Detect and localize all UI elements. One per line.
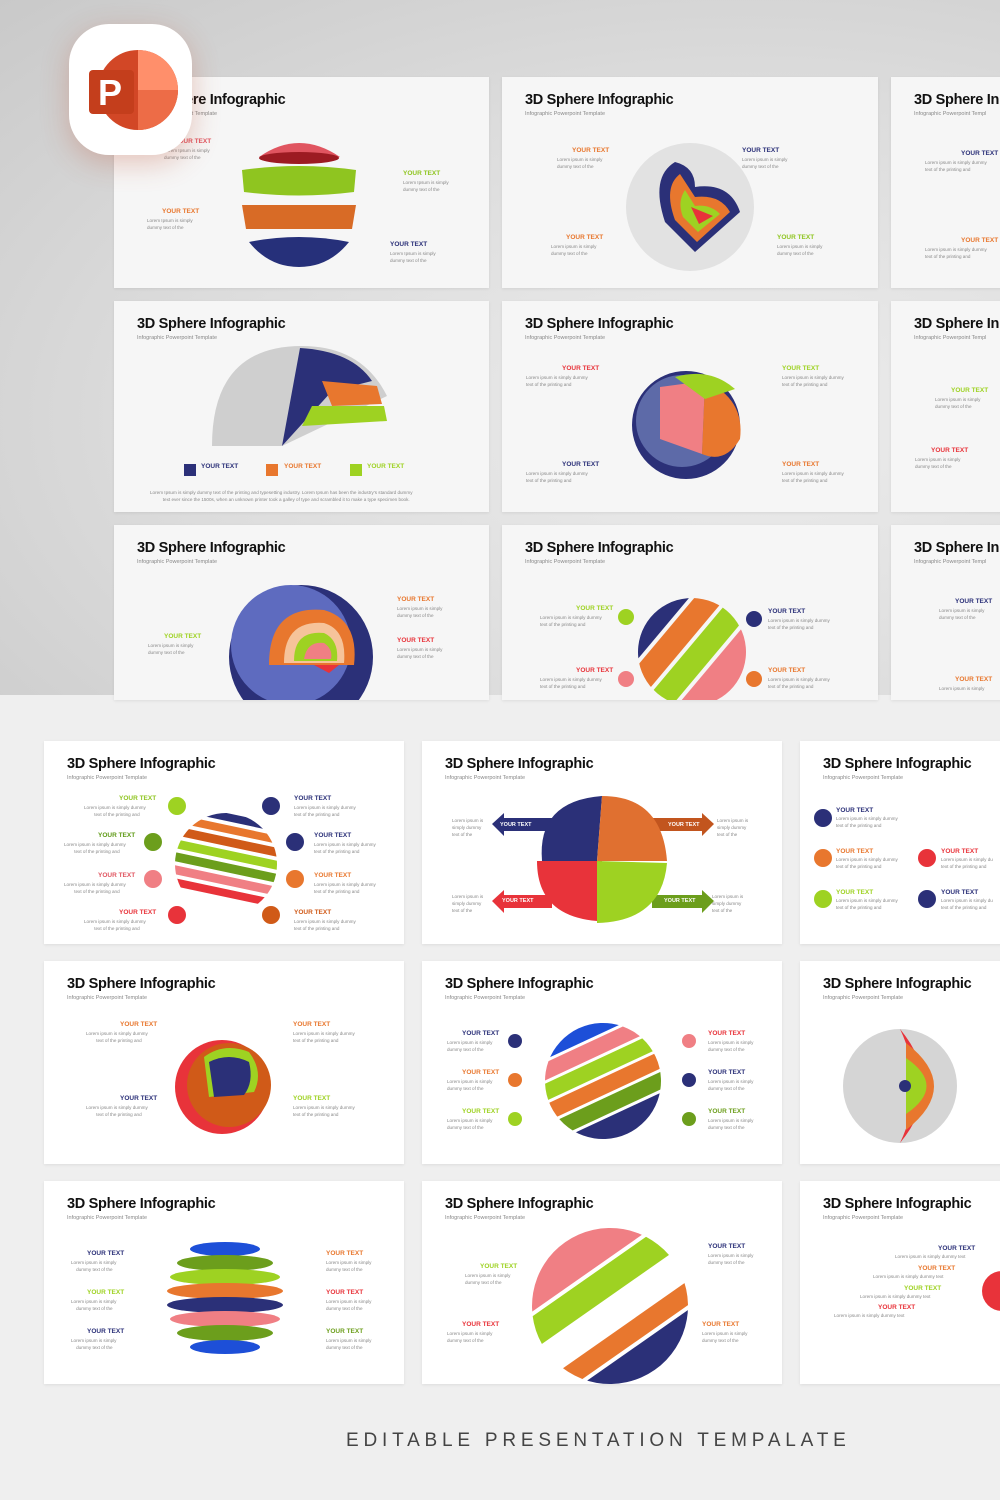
slide: diagonal striped sphere: Lorem ipsum is simply	[447, 1118, 492, 1123]
slide: big diagonal sphere: dummy text of the	[465, 1280, 502, 1285]
slide: big diagonal sphere: YOUR TEXT	[480, 1263, 517, 1270]
slide: heart sphere: dummy text of the	[777, 251, 814, 256]
slide: striped sphere with 8 items: Infographic Powerpoint Template	[67, 775, 147, 781]
slide: layered core sphere: 3D Sphere Infographic	[137, 540, 285, 556]
slide: partial list: text of the printing and	[941, 905, 986, 910]
slide: heart sphere: Infographic Powerpoint Template	[525, 111, 605, 117]
slide: partial right column top: 3D Sphere In	[914, 92, 999, 108]
slide: horizontal band sphere: dummy text of the	[403, 187, 440, 192]
slide: cut sphere: YOUR TEXT	[120, 1021, 157, 1028]
slide: heart sphere: Lorem ipsum is simply	[551, 244, 596, 249]
slide: arrows sphere: simply dummy	[452, 901, 481, 906]
slide: horizontal band sphere: Lorem Ipsum is simply	[390, 251, 436, 256]
slide: horizontal band sphere	[114, 77, 489, 288]
slide: stacked discs sphere: Infographic Powerpoint Template	[67, 1215, 147, 1221]
slide: striped sphere with 8 items: YOUR TEXT	[119, 909, 156, 916]
slide: big diagonal sphere: Lorem ipsum is simply	[702, 1331, 747, 1336]
slide: arrows sphere: Lorem ipsum is	[712, 894, 743, 899]
slide: segmented sphere: text of the printing and	[526, 478, 571, 483]
slide: diagonal bands sphere: text of the printing and	[768, 684, 813, 689]
slide: partial list 2: YOUR TEXT	[904, 1285, 941, 1292]
slide: horizontal band sphere: YOUR TEXT	[390, 241, 427, 248]
slide: partial list: Infographic Powerpoint Template	[823, 775, 903, 781]
slide: striped sphere with 8 items: text of the printing and	[74, 849, 120, 854]
slide: striped sphere with 8 items: YOUR TEXT	[119, 795, 156, 802]
slide: big diagonal sphere: dummy text of the	[702, 1338, 739, 1343]
slide: striped sphere with 8 items: Lorem ipsum is simply dummy	[314, 882, 376, 887]
slide: arrows sphere: YOUR TEXT	[500, 822, 531, 828]
slide: cut sphere: text of the printing and	[293, 1112, 338, 1117]
slide: layered core sphere: dummy text of the	[148, 650, 185, 655]
slide: cut sphere: text of the printing and	[293, 1038, 338, 1043]
slide: arrows sphere: YOUR TEXT	[668, 822, 699, 828]
slide: diagonal bands sphere: Lorem ipsum is simply dummy	[768, 618, 830, 623]
slide: stacked discs sphere: 3D Sphere Infographic	[67, 1196, 215, 1212]
slide: partial right column top: YOUR TEXT	[961, 150, 998, 157]
slide: layered core sphere: Lorem ipsum is simply	[397, 647, 442, 652]
slide: stacked discs sphere: dummy text of the	[76, 1345, 113, 1350]
slide: striped sphere with 8 items: YOUR TEXT	[294, 909, 331, 916]
slide: segmented sphere: YOUR TEXT	[562, 365, 599, 372]
slide: diagonal striped sphere: dummy text of the	[708, 1047, 745, 1052]
slide: stacked discs sphere: Lorem ipsum is simply	[326, 1260, 371, 1265]
slide: diagonal striped sphere: Lorem ipsum is simply	[447, 1040, 492, 1045]
slide: striped sphere with 8 items: text of the printing and	[314, 889, 359, 894]
slide: diagonal bands sphere: text of the printing and	[768, 625, 813, 630]
slide: arrows sphere: simply dummy	[452, 825, 481, 830]
slide: segmented sphere: text of the printing and	[782, 382, 827, 387]
slide: heart sphere: YOUR TEXT	[572, 147, 609, 154]
slide: diagonal striped sphere: Infographic Powerpoint Template	[445, 995, 525, 1001]
slide: horizontal band sphere: YOUR TEXT	[403, 170, 440, 177]
slide: quarter sphere: text ever since the 1500s, when an unknown printer took a galley of type and scrambled it to make a type specimen book.	[163, 497, 410, 502]
slide: big diagonal sphere: dummy text of the	[708, 1260, 745, 1265]
slide: cut sphere: YOUR TEXT	[120, 1095, 157, 1102]
slide: diagonal striped sphere: Lorem ipsum is simply	[447, 1079, 492, 1084]
slide: arrows sphere: 3D Sphere Infographic	[445, 756, 593, 772]
slide: partial list 2: YOUR TEXT	[878, 1304, 915, 1311]
icon circles	[168, 797, 186, 815]
slide: quarter sphere: YOUR TEXT	[201, 463, 238, 470]
slide: heart sphere: YOUR TEXT	[742, 147, 779, 154]
slide: striped sphere with 8 items: Lorem ipsum is simply dummy	[294, 919, 356, 924]
slide: cut sphere: YOUR TEXT	[293, 1095, 330, 1102]
slide: diagonal striped sphere: YOUR TEXT	[708, 1108, 745, 1115]
sphere bands	[242, 143, 356, 267]
slide: diagonal striped sphere	[422, 961, 782, 1164]
slide: partial: Infographic Powerpoint Templ	[914, 559, 986, 565]
slide: stacked discs sphere: YOUR TEXT	[87, 1328, 124, 1335]
slide: stacked discs sphere: Lorem ipsum is simply	[71, 1338, 116, 1343]
slide: layered core sphere: Infographic Powerpoint Template	[137, 559, 217, 565]
slide: arrows sphere: Lorem ipsum is	[717, 818, 748, 823]
top area background	[0, 0, 1000, 695]
slide: segmented sphere: YOUR TEXT	[562, 461, 599, 468]
slide: diagonal striped sphere: YOUR TEXT	[708, 1069, 745, 1076]
slide: partial: 3D Sphere In	[914, 540, 999, 556]
slide: partial list: Lorem ipsum is simply dummy	[836, 857, 898, 862]
slide: diagonal striped sphere: dummy text of the	[708, 1086, 745, 1091]
slide: horizontal band sphere: dummy text of the	[147, 225, 184, 230]
slide: partial list: YOUR TEXT	[941, 889, 978, 896]
slide: partial right column top: Infographic Powerpoint Templ	[914, 111, 986, 117]
slide: layered core sphere: dummy text of the	[397, 613, 434, 618]
slide: big diagonal sphere: YOUR TEXT	[708, 1243, 745, 1250]
slide: diagonal striped sphere: YOUR TEXT	[462, 1069, 499, 1076]
slide: layered core sphere: dummy text of the	[397, 654, 434, 659]
slide: arrows sphere: simply dummy	[717, 825, 746, 830]
slide: big diagonal sphere	[422, 1181, 782, 1384]
slide: striped sphere with 8 items: Lorem ipsum is simply dummy	[294, 805, 356, 810]
slide: stacked discs sphere: YOUR TEXT	[326, 1328, 363, 1335]
slide: diagonal striped sphere: dummy text of the	[447, 1047, 484, 1052]
slide: segmented sphere: text of the printing and	[526, 382, 571, 387]
slide: partial list: text of the printing and	[836, 905, 881, 910]
slide: layered core sphere: Lorem ipsum is simply	[148, 643, 193, 648]
slide: heart sphere: dummy text of the	[742, 164, 779, 169]
slide: big diagonal sphere: YOUR TEXT	[462, 1321, 499, 1328]
slide: segmented sphere: Infographic Powerpoint Template	[525, 335, 605, 341]
slide: layered core sphere: YOUR TEXT	[397, 637, 434, 644]
slide: stacked discs sphere: YOUR TEXT	[87, 1250, 124, 1257]
slide: big diagonal sphere: YOUR TEXT	[702, 1321, 739, 1328]
slide: heart sphere: 3D Sphere Infographic	[525, 92, 673, 108]
slide: layered core sphere: YOUR TEXT	[397, 596, 434, 603]
slide: cut sphere	[44, 961, 404, 1164]
striped sphere	[175, 813, 277, 904]
slide: diagonal striped sphere: Lorem ipsum is simply	[708, 1040, 753, 1045]
slide: big diagonal sphere: Lorem ipsum is simply	[447, 1331, 492, 1336]
slide: partial list: text of the printing and	[836, 864, 881, 869]
slide: cut sphere: YOUR TEXT	[293, 1021, 330, 1028]
slide: segmented sphere: Lorem ipsum is simply dummy	[782, 471, 844, 476]
slide: heart sphere: Lorem ipsum is simply	[742, 157, 787, 162]
slide: diagonal striped sphere: dummy text of the	[708, 1125, 745, 1130]
slide: arrows sphere: Infographic Powerpoint Template	[445, 775, 525, 781]
slide: layered core sphere: Lorem ipsum is simply	[397, 606, 442, 611]
slide: cut sphere: text of the printing and	[96, 1112, 142, 1117]
footer text: EDITABLE PRESENTATION TEMPALATE	[346, 1430, 851, 1451]
slide: arrows sphere: Lorem ipsum is	[452, 894, 483, 899]
slide: cut sphere: text of the printing and	[96, 1038, 142, 1043]
slide: diagonal bands sphere: YOUR TEXT	[768, 667, 805, 674]
slide: partial: 3D Sphere In	[914, 316, 999, 332]
slide: partial cross-section: 3D Sphere Infographic	[823, 976, 971, 992]
slide: quarter sphere: 3D Sphere Infographic	[137, 316, 285, 332]
slide: striped sphere with 8 items: text of the printing and	[94, 812, 140, 817]
slide: quarter sphere: Lorem Ipsum is simply dummy text of the printing and typesetting industry. Lorem Ipsum has been the industry's standard dummy	[150, 490, 413, 495]
slide: stacked discs sphere: dummy text of the	[326, 1345, 363, 1350]
slide: layered core sphere	[114, 525, 489, 700]
slide: partial: YOUR TEXT	[955, 676, 992, 683]
slide: striped sphere with 8 items: Lorem ipsum is simply dummy	[64, 842, 126, 847]
slide: partial right column top: Lorem ipsum is simply dummy	[925, 247, 987, 252]
slide: partial list: text of the printing and	[941, 864, 986, 869]
slide: striped sphere with 8 items: 3D Sphere Infographic	[67, 756, 215, 772]
slide: arrows sphere: text of the	[712, 908, 732, 913]
slide: stacked discs sphere: YOUR TEXT	[326, 1289, 363, 1296]
slide: partial: YOUR TEXT	[931, 447, 968, 454]
slide: cut sphere: Lorem ipsum is simply dummy	[293, 1031, 355, 1036]
slide: segmented sphere: YOUR TEXT	[782, 365, 819, 372]
slide: arrows sphere: YOUR TEXT	[502, 898, 533, 904]
slide: partial list 2: YOUR TEXT	[918, 1265, 955, 1272]
slide: partial list: text of the printing and	[836, 823, 881, 828]
slide: partial list 2: Lorem ipsum is simply dummy text	[834, 1313, 904, 1318]
slide: diagonal striped sphere: dummy text of the	[447, 1125, 484, 1130]
slide: partial cross-section: Infographic Powerpoint Template	[823, 995, 903, 1001]
label left top: YOUR TEXT	[174, 138, 211, 145]
slide: stacked discs sphere	[44, 1181, 404, 1384]
slide: partial list 2: 3D Sphere Infographic	[823, 1196, 971, 1212]
slide: diagonal bands sphere: Infographic Powerpoint Template	[525, 559, 605, 565]
slide: heart sphere: YOUR TEXT	[777, 234, 814, 241]
slide: stacked discs sphere: dummy text of the	[326, 1267, 363, 1272]
slide: cut sphere: 3D Sphere Infographic	[67, 976, 215, 992]
slide: diagonal bands sphere: text of the printing and	[540, 684, 585, 689]
slide: striped sphere with 8 items: Lorem ipsum is simply dummy	[84, 919, 146, 924]
slide: partial: YOUR TEXT	[955, 598, 992, 605]
slide: stacked discs sphere: Lorem ipsum is simply	[71, 1299, 116, 1304]
slide: partial: Infographic Powerpoint Templ	[914, 335, 986, 341]
slide: diagonal striped sphere: Lorem ipsum is simply	[708, 1118, 753, 1123]
slide: big diagonal sphere: dummy text of the	[447, 1338, 484, 1343]
slide: horizontal band sphere: dummy text of the	[390, 258, 427, 263]
slide: segmented sphere: YOUR TEXT	[782, 461, 819, 468]
slide: segmented sphere: Lorem ipsum is simply dummy	[782, 375, 844, 380]
label left top	[164, 138, 212, 160]
slide: arrows sphere: Lorem ipsum is	[452, 818, 483, 823]
slide: diagonal bands sphere: Lorem ipsum is simply dummy	[768, 677, 830, 682]
slide: partial right column top: text of the printing and	[925, 254, 970, 259]
slide: heart sphere: Lorem ipsum is simply	[557, 157, 602, 162]
slide: horizontal band sphere: 3D Sphere Infographic	[137, 92, 285, 108]
slide: partial: dummy text of the	[915, 464, 952, 469]
slide: heart sphere: YOUR TEXT	[566, 234, 603, 241]
slide: horizontal band sphere: Lorem Ipsum is simply	[164, 148, 210, 153]
slide: segmented sphere: text of the printing and	[782, 478, 827, 483]
slide: stacked discs sphere: dummy text of the	[326, 1306, 363, 1311]
slide: striped sphere with 8 items: Lorem ipsum is simply dummy	[84, 805, 146, 810]
slide: arrows sphere	[422, 741, 782, 944]
slide: striped sphere with 8 items: YOUR TEXT	[294, 795, 331, 802]
slide: partial list 2: Lorem ipsum is simply dummy text	[895, 1254, 965, 1259]
slide: segmented sphere	[502, 301, 878, 512]
slide: horizontal band sphere: Infographic Powerpoint Template	[137, 111, 217, 117]
slide: striped sphere with 8 items: text of the printing and	[74, 889, 120, 894]
slide: horizontal band sphere: Lorem Ipsum is simply	[147, 218, 193, 223]
slide: diagonal striped sphere: YOUR TEXT	[708, 1030, 745, 1037]
slide: cut sphere: Lorem ipsum is simply dummy	[86, 1105, 148, 1110]
slide: striped sphere with 8 items: YOUR TEXT	[314, 832, 351, 839]
slide: partial: YOUR TEXT	[951, 387, 988, 394]
slide: partial list 2: Lorem ipsum is simply dummy text	[860, 1294, 930, 1299]
slide: diagonal bands sphere: YOUR TEXT	[576, 667, 613, 674]
slide: diagonal striped sphere: YOUR TEXT	[462, 1030, 499, 1037]
slide: partial list: YOUR TEXT	[836, 889, 873, 896]
slide: partial list: YOUR TEXT	[941, 848, 978, 855]
slide: horizontal band sphere: YOUR TEXT	[162, 208, 199, 215]
slide: partial list: YOUR TEXT	[836, 848, 873, 855]
slide: arrows sphere: text of the	[452, 832, 472, 837]
slide: striped sphere with 8 items: text of the printing and	[294, 812, 339, 817]
slide: heart sphere: Lorem ipsum is simply	[777, 244, 822, 249]
slide: partial right column top: Lorem ipsum is simply dummy	[925, 160, 987, 165]
slide: big diagonal sphere: Lorem ipsum is simply	[465, 1273, 510, 1278]
slide: striped sphere with 8 items: Lorem ipsum is simply dummy	[314, 842, 376, 847]
slide: striped sphere with 8 items: text of the printing and	[94, 926, 140, 931]
heart sphere graphic	[626, 143, 754, 271]
slide: heart sphere: dummy text of the	[551, 251, 588, 256]
slide: horizontal band sphere: Lorem Ipsum is simply	[403, 180, 449, 185]
slide: cut sphere: Lorem ipsum is simply dummy	[293, 1105, 355, 1110]
slide: partial	[891, 525, 1000, 700]
slide: heart sphere: dummy text of the	[557, 164, 594, 169]
slide: striped sphere with 8 items: text of the printing and	[314, 849, 359, 854]
legend	[184, 464, 196, 476]
slide: cut sphere: Infographic Powerpoint Template	[67, 995, 147, 1001]
slide: diagonal bands sphere: Lorem ipsum is simply dummy	[540, 677, 602, 682]
bottom area	[44, 741, 1000, 1451]
slide: diagonal bands sphere: Lorem ipsum is simply dummy	[540, 615, 602, 620]
slide: striped sphere with 8 items: text of the printing and	[294, 926, 339, 931]
slide: quarter sphere: YOUR TEXT	[284, 463, 321, 470]
slide: stacked discs sphere: YOUR TEXT	[326, 1250, 363, 1257]
slide: segmented sphere: Lorem ipsum is simply dummy	[526, 471, 588, 476]
slide: partial: dummy text of the	[939, 615, 976, 620]
slide: layered core sphere: YOUR TEXT	[164, 633, 201, 640]
slide: partial right column top: YOUR TEXT	[961, 237, 998, 244]
slide: diagonal striped sphere: dummy text of the	[447, 1086, 484, 1091]
slide: stacked discs sphere: Lorem ipsum is simply	[71, 1260, 116, 1265]
slide: partial list: Lorem ipsum is simply dummy	[836, 898, 898, 903]
slide: striped sphere with 8 items: YOUR TEXT	[98, 872, 135, 879]
slide: partial list 2	[800, 1181, 1000, 1384]
slide: stacked discs sphere: Lorem ipsum is simply	[326, 1338, 371, 1343]
slide: stacked discs sphere: dummy text of the	[76, 1306, 113, 1311]
slide: partial list: Lorem ipsum is simply du	[941, 857, 993, 862]
slide: quarter sphere: Infographic Powerpoint Template	[137, 335, 217, 341]
slide: partial right column top: text of the printing and	[925, 167, 970, 172]
slide: stacked discs sphere: dummy text of the	[76, 1267, 113, 1272]
slide: diagonal bands sphere: 3D Sphere Infographic	[525, 540, 673, 556]
slide: diagonal striped sphere: 3D Sphere Infographic	[445, 976, 593, 992]
slide: stacked discs sphere: Lorem ipsum is simply	[326, 1299, 371, 1304]
icon: powerpoint logo: P	[98, 72, 122, 113]
slide: diagonal bands sphere: YOUR TEXT	[768, 608, 805, 615]
slide: partial: dummy text of the	[935, 404, 972, 409]
slide: diagonal bands sphere: text of the printing and	[540, 622, 585, 627]
slide: partial: Lorem ipsum is simply	[935, 397, 980, 402]
slide: big diagonal sphere: Infographic Powerpoint Template	[445, 1215, 525, 1221]
slide: diagonal striped sphere: YOUR TEXT	[462, 1108, 499, 1115]
slide: arrows sphere: YOUR TEXT	[664, 898, 695, 904]
slide: diagonal bands sphere: YOUR TEXT	[576, 605, 613, 612]
slide: striped sphere with 8 items	[44, 741, 404, 944]
slide: partial right column top	[891, 77, 1000, 288]
slide: partial list: Lorem ipsum is simply dummy	[836, 816, 898, 821]
slide: arrows sphere: text of the	[717, 832, 737, 837]
slide: arrows sphere: simply dummy	[712, 901, 741, 906]
slide: stacked discs sphere: YOUR TEXT	[87, 1289, 124, 1296]
slide: partial cross-section	[800, 961, 1000, 1164]
slide: segmented sphere: Lorem ipsum is simply dummy	[526, 375, 588, 380]
slide: partial: Lorem ipsum is simply	[939, 608, 984, 613]
slide: partial: Lorem ipsum is simply	[915, 457, 960, 462]
slide: partial list	[800, 741, 1000, 944]
slide: cut sphere: Lorem ipsum is simply dummy	[86, 1031, 148, 1036]
slide: partial list: YOUR TEXT	[836, 807, 873, 814]
slide: quarter sphere: YOUR TEXT	[367, 463, 404, 470]
slide: partial list: Lorem ipsum is simply du	[941, 898, 993, 903]
slide: striped sphere with 8 items: YOUR TEXT	[314, 872, 351, 879]
slide: segmented sphere: 3D Sphere Infographic	[525, 316, 673, 332]
slide: big diagonal sphere: 3D Sphere Infographic	[445, 1196, 593, 1212]
slide: partial list 2: YOUR TEXT	[938, 1245, 975, 1252]
slide: horizontal band sphere: dummy text of the	[164, 155, 201, 160]
slide: heart sphere	[502, 77, 878, 288]
slide: quarter sphere	[114, 301, 489, 512]
slide: partial list 2: Lorem ipsum is simply dummy text	[873, 1274, 943, 1279]
slide: partial	[891, 301, 1000, 512]
slide: arrows sphere: text of the	[452, 908, 472, 913]
slide: diagonal striped sphere: Lorem ipsum is simply	[708, 1079, 753, 1084]
slide: striped sphere with 8 items: Lorem ipsum is simply dummy	[64, 882, 126, 887]
slide: striped sphere with 8 items: YOUR TEXT	[98, 832, 135, 839]
slide: partial list 2: Infographic Powerpoint Template	[823, 1215, 903, 1221]
slide: partial: Lorem ipsum is simply	[939, 686, 984, 691]
icon: powerpoint logo	[69, 24, 192, 155]
slide: big diagonal sphere: Lorem ipsum is simply	[708, 1253, 753, 1258]
slide: partial list: 3D Sphere Infographic	[823, 756, 971, 772]
slide: diagonal bands sphere	[502, 525, 878, 700]
